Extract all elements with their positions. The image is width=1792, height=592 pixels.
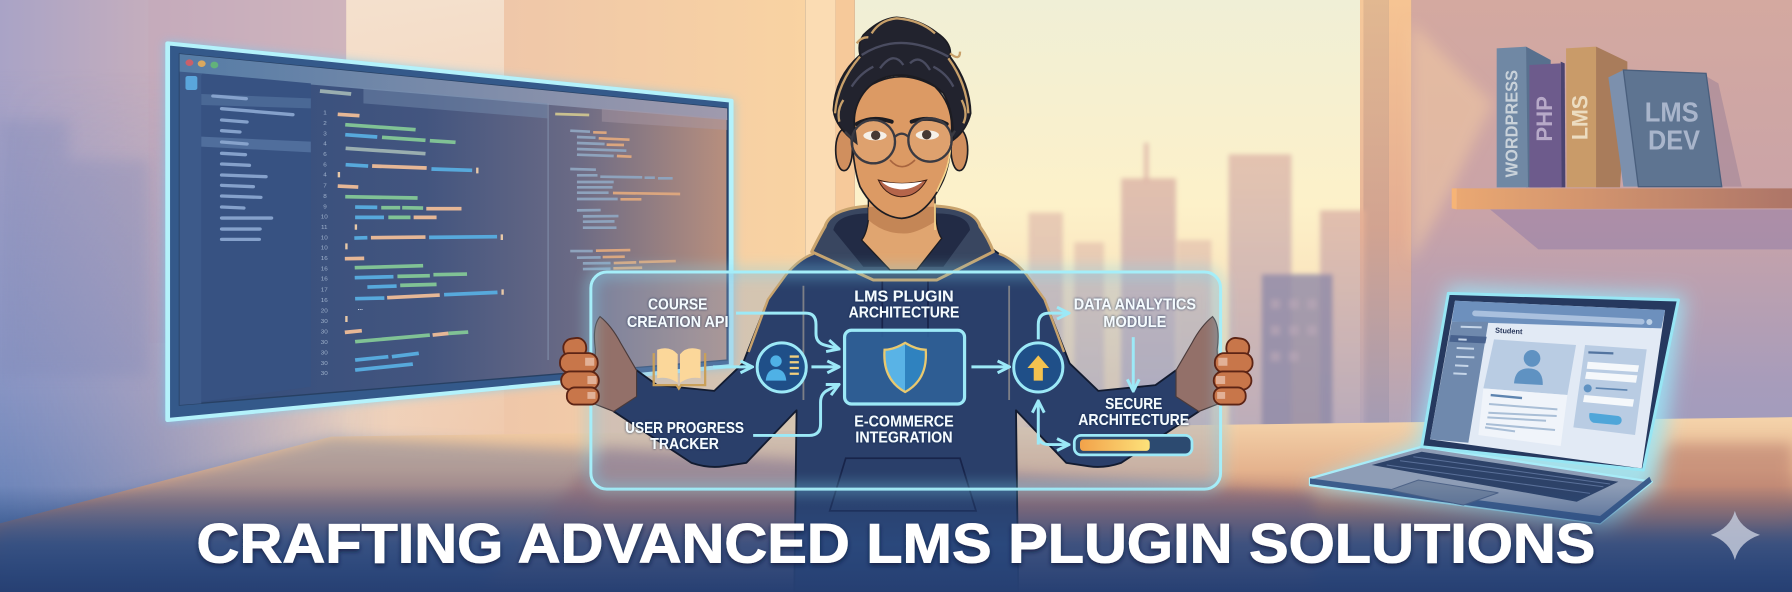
line numbers: 16 (321, 277, 328, 283)
city skyline (1029, 143, 1366, 448)
file tree (213, 96, 293, 239)
line numbers: 16 (321, 256, 328, 262)
label: secure architecture: ARCHITECTURE (1078, 412, 1189, 429)
icon: user progress circle (757, 343, 806, 392)
line numbers: ... (358, 306, 363, 312)
line numbers: 30 (321, 340, 329, 346)
label: lms plugin architecture (849, 289, 959, 322)
window buttons (185, 59, 218, 90)
progress bar (1074, 435, 1192, 455)
profile card (1483, 339, 1576, 395)
icon: upload circle (1014, 343, 1063, 392)
line numbers: 7 (323, 184, 327, 189)
panel glass backing (591, 272, 1221, 489)
label: e-commerce integration: INTEGRATION (855, 429, 953, 446)
smile (878, 180, 927, 197)
face light (935, 143, 951, 230)
book: PHP: PHP (1532, 96, 1557, 142)
left palm (593, 317, 637, 411)
book: PHP (1529, 62, 1565, 187)
hoodie gold trim (749, 254, 1064, 352)
book: LMS DEV: LMS (1645, 97, 1699, 128)
label: data analytics module: DATA ANALYTICS (1074, 297, 1196, 314)
label: secure architecture: SECURE (1105, 396, 1162, 413)
book: WORDPRESS: WORDPRESS (1501, 70, 1521, 177)
bottom navy fade (0, 486, 1792, 592)
left hand fingers (560, 337, 599, 405)
line numbers: 30 (321, 351, 329, 356)
laptop base (1310, 447, 1652, 523)
line numbers: 2 (323, 121, 327, 127)
window frame (806, 0, 1411, 457)
label: lms plugin architecture: ARCHITECTURE (849, 305, 959, 322)
nose (890, 160, 915, 167)
label: course creation api: COURSE (648, 297, 707, 314)
label: lms plugin architecture: LMS PLUGIN (854, 289, 954, 306)
line numbers: 11 (321, 225, 328, 231)
label: data analytics module: MODULE (1103, 314, 1166, 331)
monitor glow (166, 42, 733, 422)
label: e-commerce integration: E-COMMERCE (854, 413, 954, 430)
line numbers: 30 (321, 319, 329, 325)
line numbers: 20 (321, 309, 329, 315)
line numbers: 4 (323, 173, 328, 179)
icon: sparkle star (1711, 511, 1760, 560)
hood (812, 206, 993, 280)
label: course creation api (627, 297, 729, 331)
panel labels (625, 289, 1196, 453)
label: course creation api: CREATION API (627, 314, 729, 331)
connector arrows (713, 313, 1133, 445)
right hand fingers (1214, 337, 1253, 405)
monitor frame (168, 43, 731, 420)
right palm (1176, 317, 1219, 411)
hair (833, 17, 971, 143)
desk (0, 417, 1792, 592)
line numbers: 8 (323, 194, 327, 200)
label: user progress tracker: USER PROGRESS (625, 420, 744, 437)
book: LMS DEV (1608, 70, 1722, 187)
line numbers: 30 (321, 371, 329, 377)
eyebrows (857, 119, 947, 124)
label: data analytics module (1074, 297, 1196, 331)
face (852, 77, 952, 218)
label: user progress tracker: TRACKER (650, 436, 719, 453)
line numbers: 10 (321, 236, 329, 241)
hoodie torso and arms (614, 226, 1199, 592)
form card (1573, 345, 1647, 435)
book: LMS: LMS (1567, 95, 1592, 140)
label: secure architecture (1078, 396, 1189, 429)
side pane code (555, 114, 680, 269)
line numbers: 9 (323, 205, 327, 210)
line numbers: 10 (321, 246, 329, 252)
line numbers: 16 (321, 298, 328, 304)
title: CRAFTING ADVANCED LMS PLUGIN SOLUTIONS (197, 511, 1595, 574)
laptop glow (1303, 287, 1685, 530)
line numbers: 4 (323, 142, 328, 148)
shelf shadow (1490, 209, 1792, 249)
eyes (863, 130, 939, 140)
icon: shield (884, 343, 926, 392)
hoodie strings and pocket (830, 257, 976, 511)
laptop screen (1430, 301, 1665, 468)
laptop screen: Student (1495, 326, 1523, 336)
glasses (845, 131, 955, 138)
keyboard (1372, 452, 1618, 502)
label: e-commerce integration (854, 413, 954, 446)
line numbers: 17 (321, 288, 328, 293)
touchpad (1390, 480, 1498, 505)
laptop lid (1422, 293, 1678, 470)
line numbers: 16 (321, 267, 328, 272)
translucent architecture panel (591, 272, 1221, 489)
line numbers: 3 (323, 132, 327, 137)
window (855, 0, 1366, 457)
ears (836, 129, 852, 171)
line numbers: 6 (323, 163, 327, 168)
label: user progress tracker (625, 420, 744, 453)
line numbers: 1 (323, 111, 327, 117)
line numbers: 6 (323, 152, 327, 158)
icon: open book (654, 348, 705, 389)
line numbers: 30 (321, 330, 329, 336)
code lines (320, 91, 503, 370)
head and hood (812, 17, 993, 280)
neck (862, 197, 942, 270)
book: WORDPRESS (1497, 47, 1551, 187)
line numbers: 10 (321, 215, 329, 221)
shelf board (1452, 188, 1792, 209)
central plugin box with shield (845, 330, 965, 404)
book: LMS DEV: DEV (1648, 124, 1700, 155)
book: LMS (1566, 47, 1627, 187)
code monitor (166, 42, 733, 422)
line numbers: 30 (321, 361, 329, 367)
panel glow (591, 272, 1221, 489)
laptop (1303, 287, 1685, 530)
line numbers (321, 111, 363, 377)
panel border (591, 272, 1221, 489)
person in hoodie (593, 17, 1219, 592)
bookshelf with books (1452, 47, 1792, 249)
screen (180, 54, 727, 405)
